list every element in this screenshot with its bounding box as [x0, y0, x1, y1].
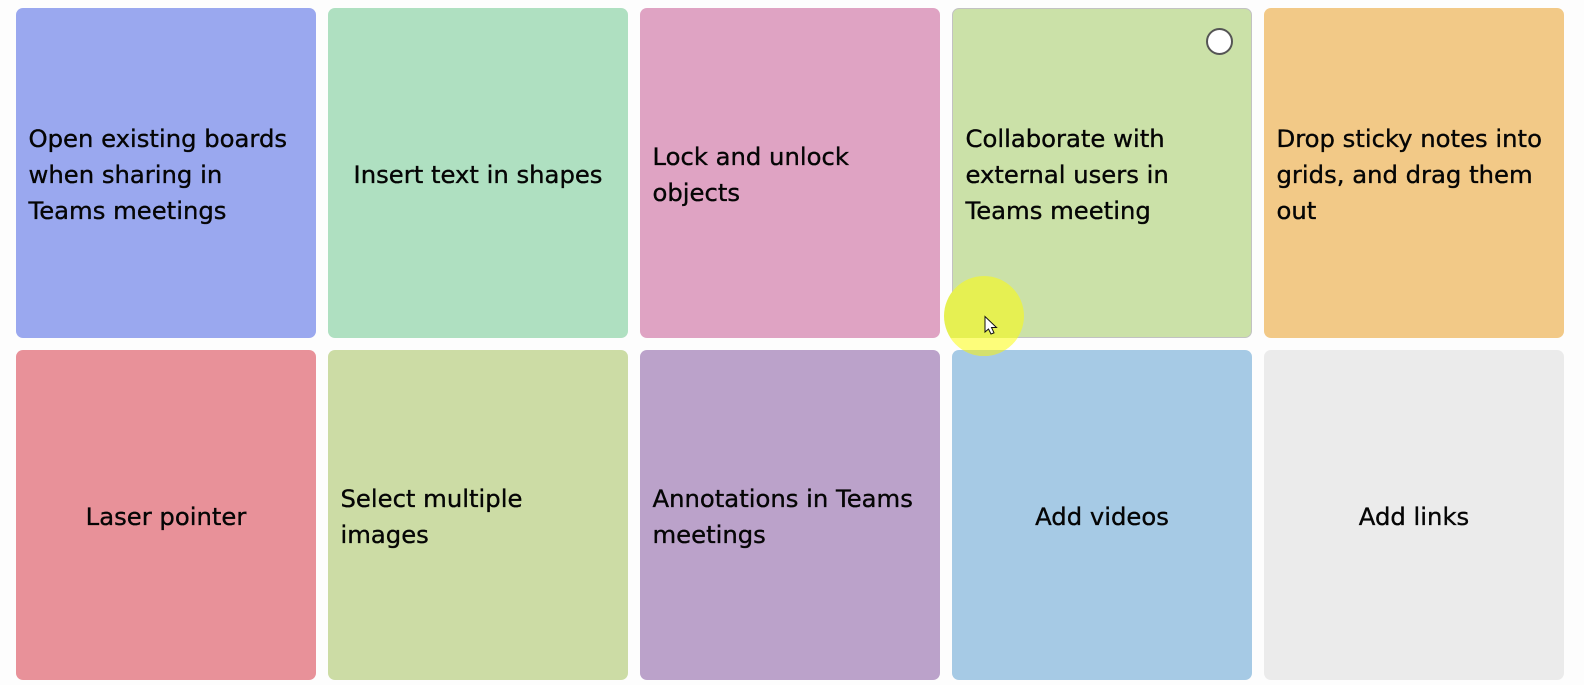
card: lock and unlock objects	[640, 8, 940, 338]
card text: Annotations in Teams	[652, 484, 913, 513]
card text	[652, 142, 850, 207]
card text: external users in	[966, 160, 1169, 189]
card text: Add videos	[1035, 502, 1169, 531]
card: drop sticky notes	[1264, 8, 1564, 338]
selection handle	[1206, 28, 1233, 55]
card text: Open existing boards	[28, 124, 287, 153]
card text: out	[1276, 196, 1316, 225]
card text: meetings	[652, 520, 766, 549]
icon: mouse pointer	[985, 316, 996, 334]
card: open existing boards	[16, 8, 316, 338]
card: laser pointer	[16, 350, 316, 680]
card text	[340, 484, 522, 549]
card text: when sharing in	[28, 160, 222, 189]
card: add videos	[952, 350, 1252, 680]
card text: objects	[652, 178, 740, 207]
card text: grids, and drag them	[1276, 160, 1533, 189]
card: select multiple images	[328, 350, 628, 680]
card: annotations in Teams meetings	[640, 350, 940, 680]
card: insert text in shapes	[328, 8, 628, 338]
card text: Add links	[1359, 502, 1469, 531]
card text	[965, 124, 1169, 225]
card text	[28, 124, 287, 225]
card text: Laser pointer	[86, 502, 246, 531]
card text	[1276, 124, 1542, 225]
card: collaborate with external users	[952, 8, 1252, 338]
card text: Teams meeting	[966, 196, 1151, 225]
card text	[652, 484, 913, 549]
card text: Collaborate with	[966, 124, 1165, 153]
card text: Drop sticky notes into	[1276, 124, 1542, 153]
card text: Teams meetings	[28, 196, 226, 225]
card text: Insert text in shapes	[354, 160, 602, 189]
card: add links	[1264, 350, 1564, 680]
card text: Select multiple	[340, 484, 522, 513]
card text: images	[340, 520, 429, 549]
cursor highlight with pointer	[944, 276, 1024, 356]
card text: Lock and unlock	[652, 142, 849, 171]
